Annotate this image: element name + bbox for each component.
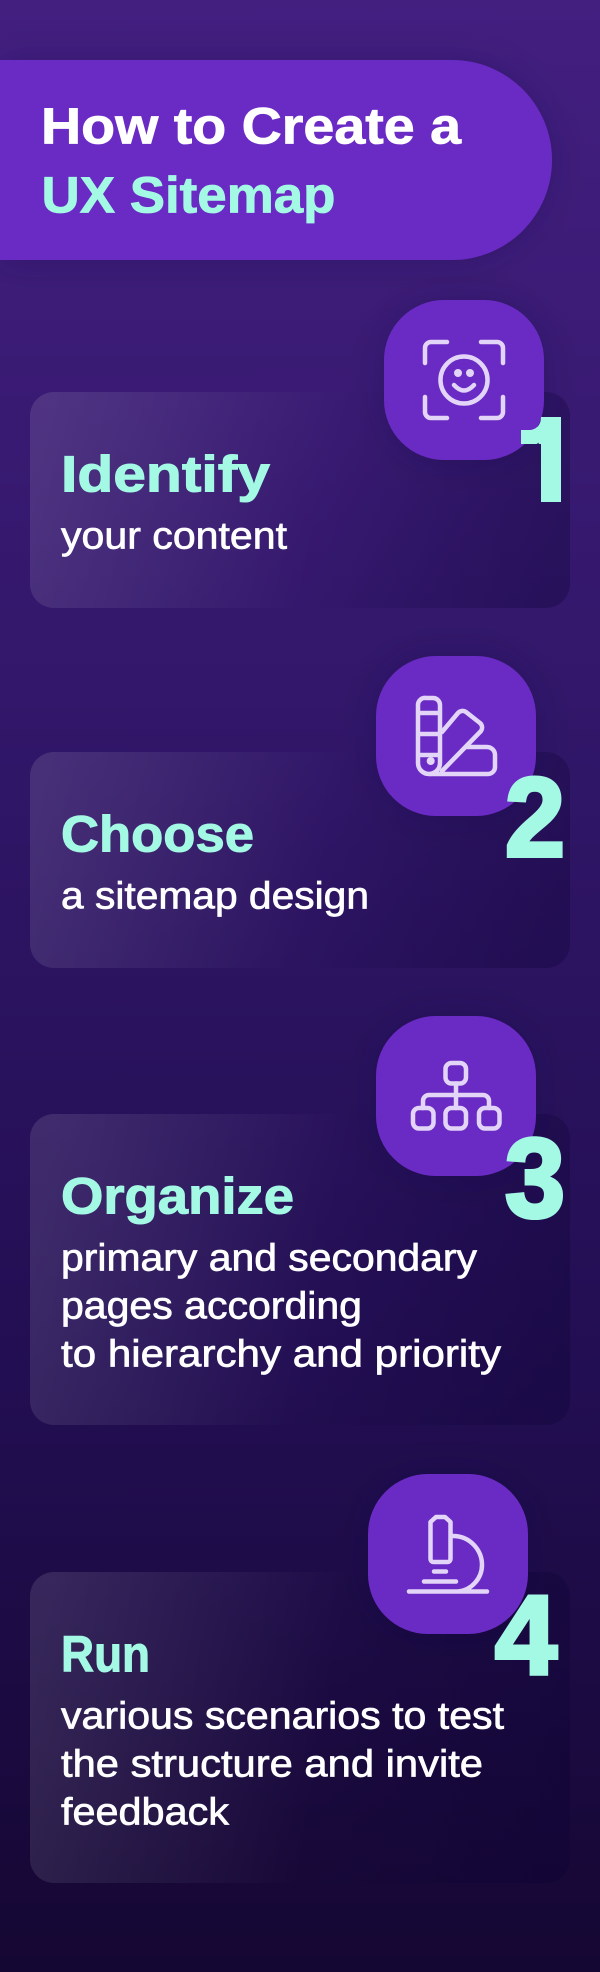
panel: step 3: pages according [61, 1286, 362, 1328]
panel: step 4: Run [61, 1626, 150, 1682]
title: UX Sitemap [42, 166, 336, 224]
panel: step 4: feedback [61, 1792, 230, 1834]
icon: hierarchy [376, 1016, 536, 1176]
title [0, 60, 552, 260]
panel: step 1 [30, 300, 578, 608]
panel: step 4: various scenarios to test [61, 1696, 504, 1738]
panel: step 2: a sitemap design [61, 876, 369, 918]
panel: step 3: primary and secondary [61, 1238, 477, 1280]
panel: step 3: to hierarchy and priority [61, 1334, 501, 1376]
icon: face scan [384, 300, 544, 460]
icon: colour swatch [376, 656, 536, 816]
panel: step 2: Choose [61, 806, 254, 862]
panel: step 1: Identify [61, 446, 271, 502]
panel: step 2 [30, 656, 570, 968]
number 2: 2 [505, 755, 565, 880]
number 3: 3 [505, 1116, 565, 1240]
number 1: 1 [518, 394, 578, 528]
title: How to Create a [41, 98, 462, 154]
number 4: 4 [495, 1573, 557, 1698]
panel: step 1: your content [61, 516, 287, 558]
icon: microscope [368, 1474, 528, 1634]
panel: step 4 [30, 1474, 570, 1883]
panel: step 3: Organize [61, 1168, 294, 1224]
panel: step 3 [30, 1016, 570, 1425]
panel: step 4: the structure and invite [61, 1744, 483, 1786]
